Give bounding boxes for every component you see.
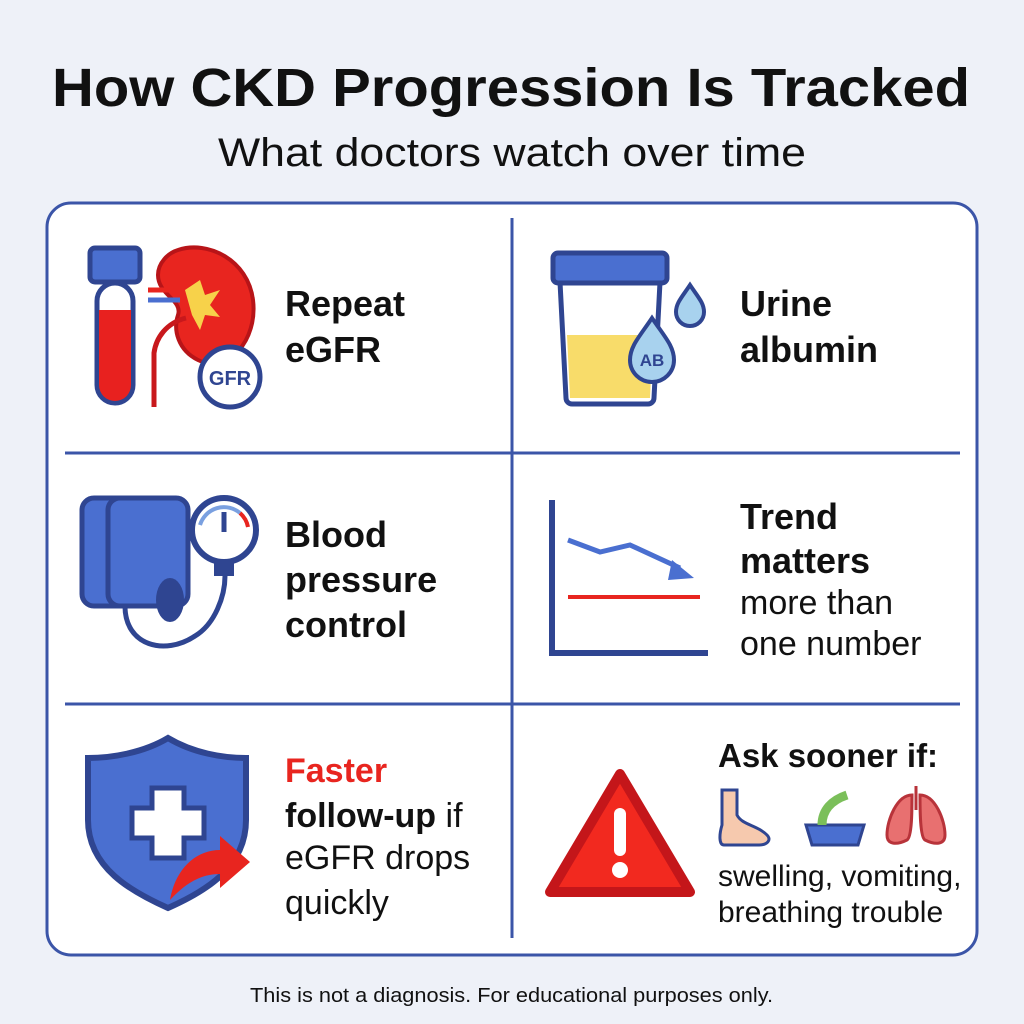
icon: blood pressure cuff bbox=[82, 498, 256, 646]
text: blood pressure control: pressure bbox=[285, 559, 437, 600]
text: symptoms: breathing trouble bbox=[718, 896, 943, 929]
text: urine albumin: albumin bbox=[740, 329, 878, 370]
text: faster follow-up: follow-up if bbox=[285, 797, 463, 835]
chart: trend line bbox=[552, 500, 708, 653]
icon: urine cup bbox=[553, 253, 704, 404]
text: faster follow-up: Faster bbox=[285, 752, 387, 790]
text: repeat eGFR: Repeat bbox=[285, 283, 405, 324]
text: trend matters: Trend bbox=[740, 496, 838, 537]
title: How CKD Progression Is Tracked bbox=[52, 58, 970, 118]
icon: blood tube and kidney: GFR bbox=[209, 368, 252, 390]
icon: warning triangle bbox=[550, 774, 690, 892]
icon: blood tube and kidney bbox=[90, 247, 260, 407]
text: faster follow-up: eGFR drops bbox=[285, 839, 470, 877]
text: symptoms: swelling, vomiting, bbox=[718, 860, 961, 893]
text: blood pressure control: control bbox=[285, 604, 407, 645]
footer: This is not a diagnosis. For educational purposes only. bbox=[250, 985, 773, 1007]
subtitle: What doctors watch over time bbox=[218, 131, 806, 175]
icons: symptoms bbox=[720, 786, 945, 845]
text: repeat eGFR: eGFR bbox=[285, 329, 381, 370]
text: ask sooner: Ask sooner if: bbox=[718, 737, 938, 774]
icon: shield with arrow bbox=[88, 738, 250, 908]
text: trend matters: one number bbox=[740, 625, 921, 663]
text: urine albumin: Urine bbox=[740, 283, 832, 324]
text: faster follow-up: quickly bbox=[285, 884, 389, 922]
text: trend matters: more than bbox=[740, 584, 893, 622]
text: blood pressure control: Blood bbox=[285, 514, 387, 555]
text: trend matters: matters bbox=[740, 540, 870, 581]
main panel bbox=[47, 203, 977, 955]
icon: urine cup: AB bbox=[640, 351, 664, 370]
